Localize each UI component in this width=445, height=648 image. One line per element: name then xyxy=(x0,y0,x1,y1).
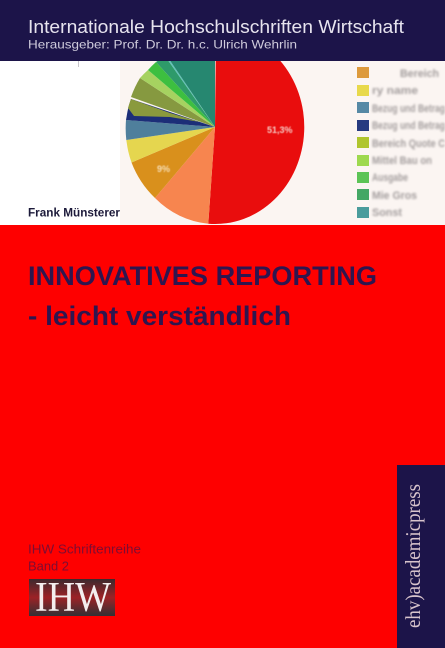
publisher name: ehv)academicpress xyxy=(401,484,425,628)
series info xyxy=(28,542,141,574)
slice label: 9% xyxy=(157,164,170,174)
publisher panel xyxy=(397,465,445,648)
image panel: pie chart with legend xyxy=(0,61,445,225)
book title: - leicht verständlich xyxy=(28,301,291,331)
legend: ry name xyxy=(372,85,418,97)
logo: IHW: IHW xyxy=(35,575,111,621)
author: Frank Münsterer xyxy=(28,208,121,220)
header band xyxy=(0,0,445,61)
legend xyxy=(357,67,445,219)
legend: Mie Gros xyxy=(372,190,417,202)
series info: IHW Schriftenreihe xyxy=(28,542,141,556)
editor line: Herausgeber: Prof. Dr. Dr. h.c. Ulrich Wehrlin xyxy=(28,38,297,52)
legend: Mittel Bau on xyxy=(372,155,432,167)
legend: Ausgabe xyxy=(372,172,408,184)
series title: Internationale Hochschulschriften Wirtschaft xyxy=(28,16,404,37)
series info: Band 2 xyxy=(28,558,69,574)
slice label: 51,3% xyxy=(267,125,293,135)
book title: INNOVATIVES REPORTING xyxy=(28,261,377,291)
pie chart xyxy=(126,61,304,224)
legend: Bereich xyxy=(400,68,439,80)
book title xyxy=(28,261,377,331)
legend: Sonst xyxy=(372,207,402,219)
